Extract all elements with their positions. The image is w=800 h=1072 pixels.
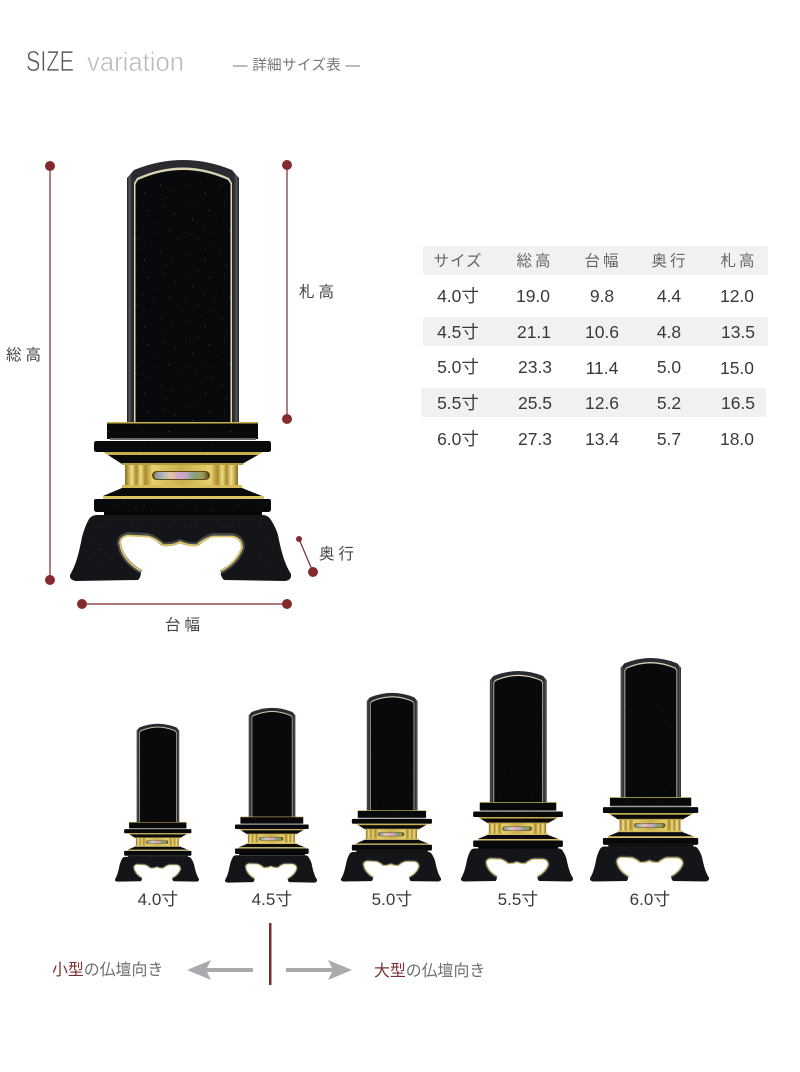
dimension: tablet height: [282, 160, 338, 424]
size table: 総高: [516, 252, 554, 270]
size table: 16.5: [721, 393, 755, 413]
size table: 13.5: [721, 322, 755, 342]
size table: 19.0: [516, 286, 550, 306]
dimension: total height: [6, 161, 55, 585]
tablet 4.5 sun: [225, 708, 317, 909]
dimension: depth: [296, 536, 358, 577]
size table: 奥行: [651, 252, 689, 270]
tablet 5.5 sun: 5.5寸: [498, 890, 538, 909]
dimension: total height: 総高: [6, 346, 45, 364]
size table: 5.5寸: [437, 393, 479, 413]
tablet 4.5 sun: 4.5寸: [252, 890, 292, 909]
size table: 18.0: [720, 429, 754, 449]
size table: 27.3: [518, 429, 552, 449]
size table: 10.6: [585, 322, 619, 342]
size table: 4.4: [657, 286, 681, 306]
tablet 4.0 sun: 4.0寸: [138, 890, 178, 909]
dimension: base width: 台幅: [165, 616, 204, 634]
label: for large altars: 大型の仏壇向き: [374, 962, 485, 980]
size table: 6.0寸: [437, 429, 479, 449]
title: variation: [87, 47, 184, 77]
tablet 6.0 sun: 6.0寸: [630, 890, 670, 909]
arrow: left: [187, 960, 253, 980]
dimension: depth: 奥行: [319, 545, 358, 563]
size table: 13.4: [585, 429, 619, 449]
title: SIZE: [26, 46, 74, 78]
arrow: right: [286, 960, 352, 980]
size table: 5.2: [657, 393, 681, 413]
size table: サイズ: [433, 252, 483, 270]
size table: 4.0寸: [437, 286, 479, 306]
size table: 12.6: [585, 393, 619, 413]
size table: 4.8: [657, 322, 681, 342]
size table: [421, 246, 768, 449]
size table: 札高: [720, 252, 758, 270]
size table: 15.0: [720, 358, 754, 378]
tablet 6.0 sun: [590, 658, 709, 909]
size table: 9.8: [590, 286, 614, 306]
size table: 5.0寸: [437, 357, 479, 377]
subtitle: ― 詳細サイズ表 ―: [233, 57, 360, 74]
title: [26, 46, 184, 78]
main tablet diagram: [70, 160, 291, 581]
tablet 4.0 sun: [115, 724, 199, 909]
tablet 5.0 sun: 5.0寸: [372, 890, 412, 909]
dimension: tablet height: 札高: [299, 283, 338, 301]
size table: 11.4: [586, 358, 619, 378]
size table: 5.0: [657, 357, 681, 377]
size table: 4.5寸: [437, 322, 479, 342]
dimension: base width: [77, 599, 292, 634]
size table: 台幅: [584, 252, 622, 270]
size table: 21.1: [517, 322, 551, 342]
label: for small altars: 小型の仏壇向き: [52, 961, 163, 979]
size table: 23.3: [518, 357, 552, 377]
size table: 12.0: [720, 286, 754, 306]
tablet 5.5 sun: [461, 671, 573, 909]
size table: 5.7: [657, 429, 681, 449]
divider: [269, 923, 272, 985]
size table: 25.5: [518, 393, 552, 413]
tablet 5.0 sun: [341, 693, 441, 909]
